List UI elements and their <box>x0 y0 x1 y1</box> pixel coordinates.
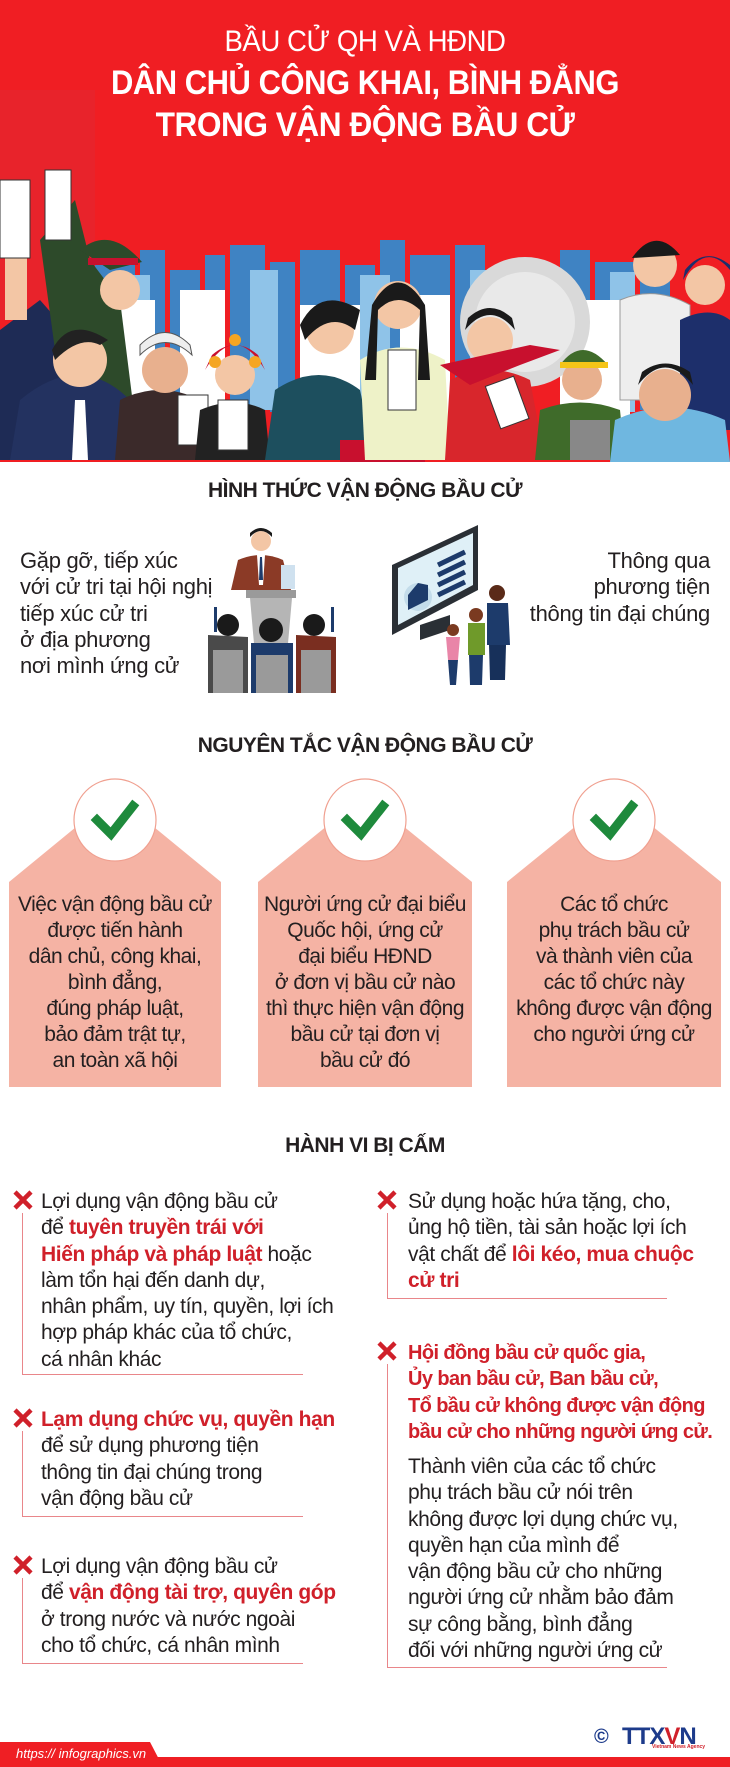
card 3 text: cho người ứng cử <box>533 1023 695 1046</box>
card 2 text: đại biểu HĐND <box>298 945 432 968</box>
prohibited item 4: ủng hộ tiền, tài sản hoặc lợi ích <box>408 1216 686 1239</box>
card 1 text: bảo đảm trật tự, <box>44 1023 186 1046</box>
card 1 text: được tiến hành <box>47 919 183 942</box>
title: DÂN CHỦ CÔNG KHAI, BÌNH ĐẲNG <box>111 64 619 102</box>
prohibited item 5: Ủy ban bầu cử, Ban bầu cử, <box>408 1368 658 1390</box>
heading: nguyên tắc: NGUYÊN TẮC VẬN ĐỘNG BẦU CỬ <box>198 734 532 757</box>
text: gặp gỡ: tiếp xúc cử tri <box>20 601 148 626</box>
prohibited item 3: Lợi dụng vận động bầu cử <box>41 1555 278 1578</box>
prohibited item 2: Lạm dụng chức vụ, quyền hạn <box>41 1408 335 1431</box>
prohibited item 5: người ứng cử nhằm bảo đảm <box>408 1586 673 1609</box>
title <box>111 24 619 144</box>
prohibited item 4: Sử dụng hoặc hứa tặng, cho, <box>408 1190 671 1213</box>
prohibited item 1: Hiến pháp và pháp luật hoặc <box>41 1243 311 1266</box>
title: BẦU CỬ QH VÀ HĐND <box>224 25 506 58</box>
prohibited item 5: đối với những người ứng cử <box>408 1639 662 1662</box>
logo: TTXVN <box>594 1723 705 1750</box>
text: gặp gỡ: với cử tri tại hội nghị <box>20 574 212 599</box>
prohibited item 5: Tổ bầu cử không được vận động <box>408 1395 705 1417</box>
prohibited item 2: thông tin đại chúng trong <box>41 1461 262 1484</box>
card 1 text: dân chủ, công khai, <box>29 945 201 968</box>
text: thông qua: phương tiện <box>594 574 710 599</box>
card 2 text: Người ứng cử đại biểu <box>264 893 466 916</box>
prohibited item 3: để vận động tài trợ, quyên góp <box>41 1581 336 1604</box>
card 2 text <box>264 893 466 1072</box>
card 2 text: Quốc hội, ứng cử <box>287 919 443 942</box>
card 1 text <box>18 893 212 1072</box>
text: gặp gỡ: ở địa phương <box>20 627 151 652</box>
card 3 text: Các tổ chức <box>560 893 668 916</box>
card 3 text: và thành viên của <box>536 945 692 968</box>
prohibited item 2: để sử dụng phương tiện <box>41 1434 259 1457</box>
footer bar with url: https:// infographics.vn <box>16 1746 146 1761</box>
prohibited item 5: sự công bằng, bình đẳng <box>408 1613 632 1636</box>
card 1 text: an toàn xã hội <box>53 1049 177 1072</box>
prohibited item 5: phụ trách bầu cử nói trên <box>408 1481 633 1504</box>
card 1 text: Việc vận động bầu cử <box>18 893 212 916</box>
card 1 text: bình đẳng, <box>68 971 162 994</box>
prohibited item 1: nhân phẩm, uy tín, quyền, lợi ích <box>41 1295 333 1318</box>
prohibited item 1: làm tổn hại đến danh dự, <box>41 1269 265 1292</box>
header: red banner with illustration <box>0 0 730 462</box>
logo: TTXVN: Vietnam News Agency <box>652 1744 705 1750</box>
card 3 text <box>516 893 712 1046</box>
text: thông qua <box>530 548 710 626</box>
prohibited item 1: cá nhân khác <box>41 1348 161 1371</box>
card 3 text: không được vận động <box>516 997 712 1020</box>
prohibited item 5: bầu cử cho những người ứng cử. <box>408 1421 712 1443</box>
prohibited item 5: Thành viên của các tổ chức <box>408 1455 656 1478</box>
title: TRONG VẬN ĐỘNG BẦU CỬ <box>156 106 574 144</box>
prohibited item 2 <box>14 1408 335 1517</box>
text: thông qua: Thông qua <box>608 548 710 573</box>
prohibited item 2: vận động bầu cử <box>41 1487 193 1510</box>
heading: hình thức: HÌNH THỨC VẬN ĐỘNG BẦU CỬ <box>208 479 522 502</box>
prohibited item 3 <box>14 1555 336 1664</box>
prohibited item 4: vật chất để lôi kéo, mua chuộc <box>408 1243 694 1266</box>
text: gặp gỡ: nơi mình ứng cử <box>20 653 179 678</box>
card 2 text: bầu cử đó <box>320 1049 410 1072</box>
heading: hành vi bị cấm: HÀNH VI BỊ CẤM <box>285 1134 445 1157</box>
card 1 text: đúng pháp luật, <box>46 997 184 1020</box>
icon: speaker at podium <box>208 528 336 693</box>
prohibited item 3: ở trong nước và nước ngoài <box>41 1608 295 1631</box>
prohibited item 5 <box>378 1341 712 1668</box>
icon: TV screen and viewers <box>392 525 510 685</box>
logo: TTXVN: TTXVN <box>622 1723 696 1750</box>
text: gặp gỡ: Gặp gỡ, tiếp xúc <box>20 548 178 573</box>
prohibited item 5: Hội đồng bầu cử quốc gia, <box>408 1342 645 1364</box>
prohibited item 1: Lợi dụng vận động bầu cử <box>41 1190 278 1213</box>
card 2 text: ở đơn vị bầu cử nào <box>275 971 455 994</box>
prohibited item 5: không được lợi dụng chức vụ, <box>408 1508 678 1531</box>
card 3 text: các tổ chức này <box>544 971 684 994</box>
prohibited item 1 <box>14 1190 333 1375</box>
card 2 text: thì thực hiện vận động <box>266 997 464 1020</box>
prohibited item 1: để tuyên truyền trái với <box>41 1216 263 1239</box>
prohibited item 3: cho tổ chức, cá nhân mình <box>41 1634 280 1657</box>
principle cards background <box>9 778 721 1087</box>
text: thông qua: thông tin đại chúng <box>530 601 710 626</box>
text: gặp gỡ <box>20 548 212 678</box>
prohibited item 4: cử tri <box>408 1269 459 1292</box>
footer bar with url <box>0 1742 730 1767</box>
prohibited item 5: vận động bầu cử cho những <box>408 1560 662 1583</box>
card 3 text: phụ trách bầu cử <box>539 919 689 942</box>
logo: TTXVN: © <box>594 1726 609 1748</box>
prohibited item 1: hợp pháp khác của tổ chức, <box>41 1321 292 1344</box>
card 2 text: bầu cử tại đơn vị <box>291 1023 439 1046</box>
prohibited item 5: quyền hạn của mình để <box>408 1534 619 1557</box>
prohibited item 4 <box>378 1190 694 1299</box>
